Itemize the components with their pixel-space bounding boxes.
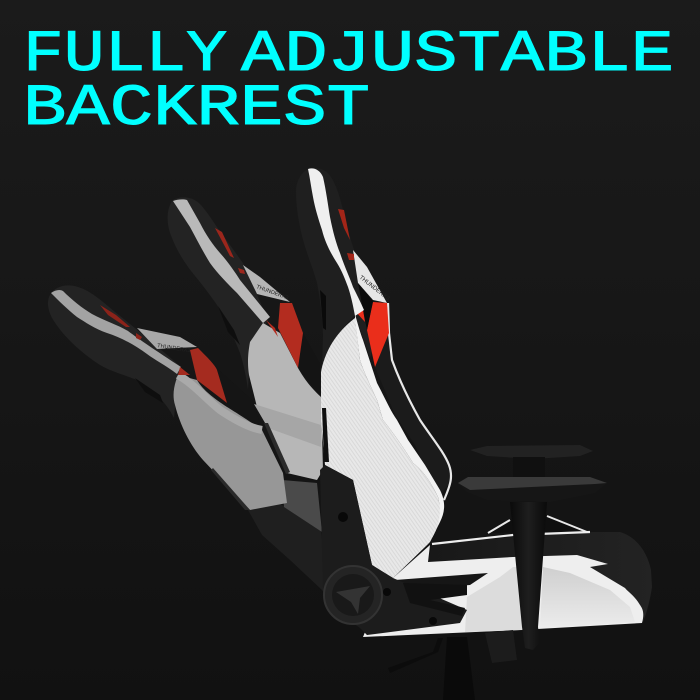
side opening: [218, 306, 240, 345]
lower pad: [458, 477, 607, 502]
lift lever: [388, 638, 443, 673]
black back bolster: [375, 333, 452, 498]
white head stripe: [308, 168, 364, 316]
red panel: [367, 302, 389, 367]
side opening: [320, 290, 326, 330]
label panel: [137, 328, 197, 349]
side slot: [211, 468, 250, 510]
label panel: [353, 250, 387, 303]
black cushion top: [428, 532, 652, 622]
connector: [513, 457, 545, 477]
recline hub: [324, 566, 382, 624]
headrest black: [168, 197, 268, 390]
seat carbon panel: [540, 567, 635, 628]
red panel: [278, 303, 303, 368]
title: FULLY: [23, 23, 227, 88]
brand text: THUNDERX3: [255, 284, 289, 301]
outer white piping: [388, 303, 451, 500]
red logo: [215, 228, 245, 274]
red panel: [190, 348, 227, 403]
seat cushion: [363, 516, 652, 637]
side opening: [135, 378, 163, 403]
body panel: [248, 323, 323, 480]
hub logo: [336, 586, 370, 614]
armrest: [458, 445, 607, 650]
label panel: [243, 265, 290, 302]
headrest black: [296, 168, 378, 372]
upper pad: [470, 445, 593, 459]
red logo: [100, 305, 142, 340]
white bolster: [355, 314, 444, 578]
bolster strip: [178, 375, 262, 430]
seat side panel: [465, 567, 522, 632]
title: BACKREST: [23, 77, 370, 142]
triangle piping: [488, 516, 587, 533]
stripe: [173, 199, 270, 323]
white seat: [363, 545, 643, 637]
side carbon panel: [321, 318, 440, 578]
lowest reclined backrest: [48, 285, 330, 600]
title: [23, 23, 674, 142]
headrest black: [48, 285, 180, 418]
title: ADJUSTABLE: [241, 23, 674, 88]
back black: [292, 303, 320, 395]
back triangle: [488, 516, 587, 533]
back black: [198, 348, 262, 428]
brand text: THUNDERX3: [358, 275, 391, 303]
gas lift: [443, 637, 475, 700]
post: [510, 502, 547, 650]
dark inner wedge: [358, 283, 373, 330]
dark wedge: [395, 573, 488, 590]
tilt knob: [485, 630, 517, 663]
bolt holes: [338, 512, 348, 522]
body band: [254, 404, 321, 447]
bracket slit: [264, 423, 290, 474]
recline lever: [403, 583, 467, 616]
bracket ghost: [248, 504, 330, 600]
chair base: [388, 630, 517, 700]
white piping: [432, 532, 590, 544]
brand text: THUNDERX3: [157, 343, 191, 354]
body panel: [174, 375, 287, 510]
side bracket: [320, 465, 467, 635]
middle reclined backrest: [168, 197, 323, 480]
red logo: [338, 209, 354, 260]
upright backrest: [296, 168, 452, 578]
stripe: [51, 290, 181, 374]
seam slot: [322, 408, 329, 462]
